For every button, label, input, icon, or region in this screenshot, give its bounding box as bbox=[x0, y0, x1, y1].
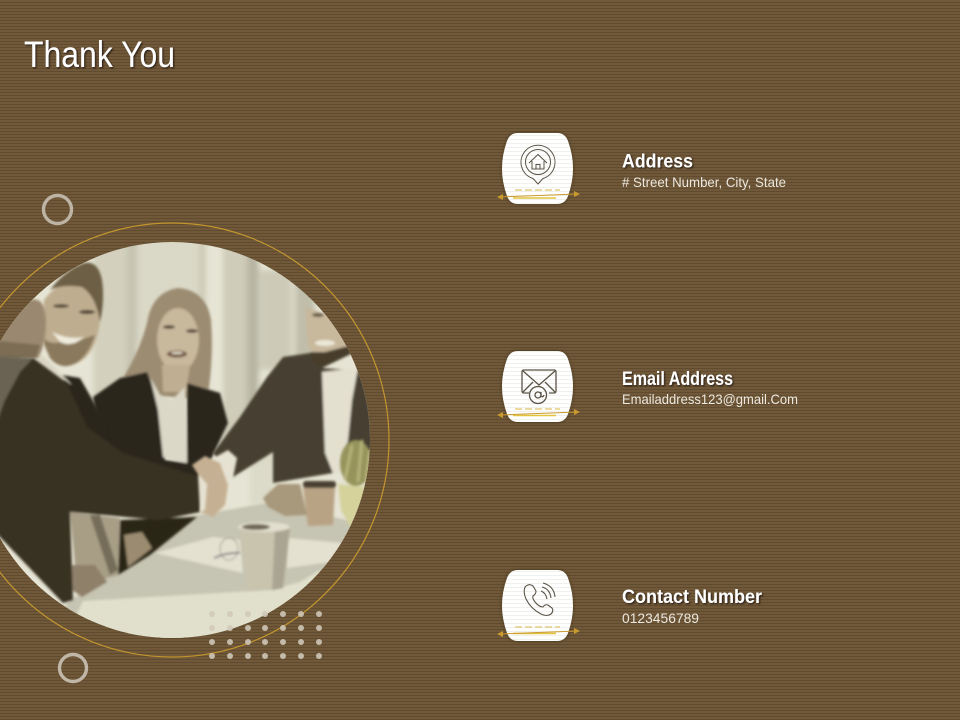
gold arrow: address bbox=[497, 190, 580, 200]
gold arrow: phone bbox=[497, 627, 580, 637]
icon: envelope with at sign bbox=[522, 370, 556, 404]
icon: telephone handset bbox=[524, 583, 555, 616]
window background bbox=[0, 235, 390, 645]
decorative ring: bottom bbox=[60, 654, 86, 682]
gold arrow: email bbox=[497, 409, 580, 418]
title: Thank You bbox=[24, 34, 175, 75]
icon: house location pin bbox=[521, 145, 555, 184]
foreground man with handshake bbox=[0, 355, 205, 603]
text: email: Emailaddress123@gmail.Com bbox=[622, 391, 798, 407]
coffee cups and plant bbox=[238, 440, 372, 590]
man on right bbox=[213, 307, 378, 483]
handshake hands bbox=[192, 450, 237, 517]
heading: address: Address bbox=[622, 152, 693, 172]
contact item: phone bbox=[497, 570, 763, 641]
contact item: email bbox=[497, 351, 798, 422]
icon card: phone bbox=[502, 570, 573, 641]
gold outline circle bbox=[0, 223, 389, 657]
icon card: address bbox=[502, 133, 573, 204]
text: street: # Street Number, City, State bbox=[622, 174, 786, 190]
icon card: email bbox=[502, 351, 573, 422]
decorative dot grid bbox=[209, 611, 322, 659]
table with papers bbox=[64, 503, 354, 638]
foreground man's head bbox=[0, 299, 46, 360]
heading: email address: Email Address bbox=[622, 369, 733, 390]
text: phone number: 0123456789 bbox=[622, 610, 699, 626]
contact item: address bbox=[497, 133, 786, 204]
heading: contact number: Contact Number bbox=[622, 587, 763, 608]
woman bbox=[93, 288, 228, 490]
circular photo: business handshake bbox=[0, 235, 390, 650]
decorative ring: top bbox=[44, 196, 72, 224]
man on left bbox=[36, 261, 105, 438]
